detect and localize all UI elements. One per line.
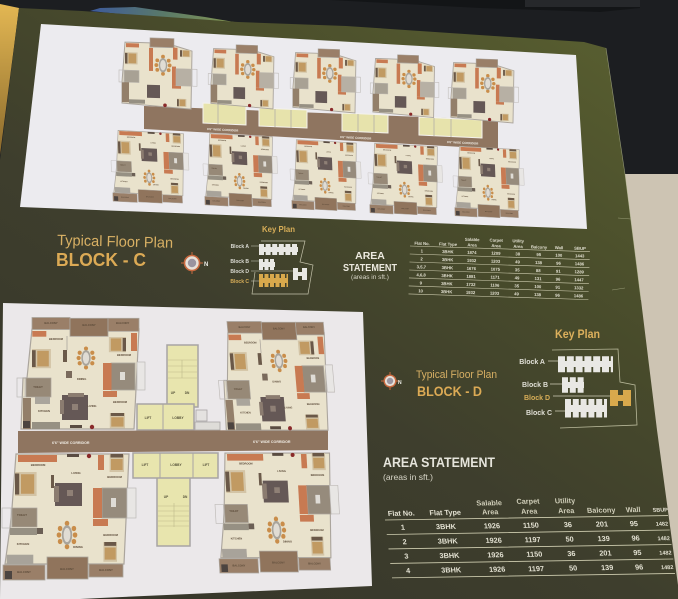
upper stair core <box>137 345 220 430</box>
table: Block D area statement: 201 <box>599 548 612 558</box>
key plan: Block C <box>230 224 313 294</box>
lower stair core: LIFT <box>203 463 209 467</box>
table: Block C area statement: Wall <box>555 245 563 250</box>
table: Block C area statement: 1676 <box>467 266 477 271</box>
table: Block D area statement: 1926 <box>488 565 506 574</box>
table: Block D area statement: Salable <box>476 498 502 508</box>
lower stair core: DN <box>183 495 188 499</box>
flat: top left <box>17 318 145 429</box>
table: Block C area statement <box>408 235 590 300</box>
table: Block D area statement: 1482 <box>661 565 674 571</box>
key plan: Block C: Block B <box>230 259 249 265</box>
key plan: Block C: Block C <box>230 279 249 285</box>
icon: north compass C: N <box>204 262 208 268</box>
upper stair core: LIFT <box>145 416 151 420</box>
table: Block C area statement: 100 <box>534 284 542 289</box>
key plan: Block D: Block A <box>519 359 545 366</box>
table: Block C area statement: 10 <box>418 288 424 293</box>
table: Block D area statement: 201 <box>595 520 609 529</box>
table: Block D area statement: 1482 <box>659 551 672 557</box>
corridor: Block D: 6'6" WIDE CORRIDOR <box>253 440 291 444</box>
table: Block D area statement <box>382 495 676 578</box>
lower stair core: UP <box>164 495 169 499</box>
table: Block C area statement: 138 <box>535 260 543 265</box>
table: Block C area statement: 49 <box>515 275 520 280</box>
corridor: Block D: 6'6" WIDE CORRIDOR <box>52 441 90 445</box>
table: Block D area statement: 96 <box>631 534 640 543</box>
table: Block C area statement: Flat Type <box>439 241 458 247</box>
heading: Block D: Typical Floor Plan <box>416 369 497 381</box>
table: Block C area statement: 49 <box>514 291 520 296</box>
table: Block C area statement: Carpet <box>490 237 504 243</box>
top row flats <box>119 37 518 123</box>
table: Block C area statement: 100 <box>555 253 563 258</box>
table: Block D area statement: 1 <box>400 523 405 532</box>
background: beige fabric surface <box>625 174 678 599</box>
core: stair and lift lobbies <box>203 103 482 138</box>
key plan: Block D: Block D <box>524 395 550 402</box>
table: Block D area statement: 3 <box>404 552 409 561</box>
table: Block D area statement: 96 <box>635 562 644 572</box>
table: Block C area statement: 38 <box>515 251 521 256</box>
flat: bottom left <box>2 454 136 580</box>
area statement heading: Block D: (areas in sft.) <box>383 472 433 482</box>
icon: north compass D <box>381 372 402 390</box>
table: Block C area statement: 1486 <box>574 293 584 298</box>
table: Block C area statement: 1203 <box>490 291 500 296</box>
table: Block D area statement: 3BHK <box>441 565 462 575</box>
table: Block D area statement: Flat Type <box>429 508 461 517</box>
bottom row flats <box>110 130 525 220</box>
table: Block C area statement: Area <box>467 242 477 248</box>
table: Block C area statement: 1289 <box>575 269 585 274</box>
heading: Block D: BLOCK - D <box>417 383 482 399</box>
upper stair core: LOBBY <box>172 416 184 420</box>
area statement heading: Block D <box>383 454 495 482</box>
table: Block C area statement: Utility <box>512 238 525 244</box>
area statement heading: Block C: AREA <box>355 250 385 262</box>
table: Block C area statement: 1203 <box>491 259 501 264</box>
table: Block C area statement: Area <box>491 243 501 248</box>
table: Block C area statement: 1932 <box>466 290 476 295</box>
heading: Block C: BLOCK - C <box>56 250 146 270</box>
table: Block C area statement: 3BHK <box>442 265 453 270</box>
table: Block C area statement: 3BHK <box>441 273 453 278</box>
table: Block C area statement: 1932 <box>467 258 477 263</box>
table: Block D area statement: 95 <box>633 548 642 557</box>
table: Block C area statement: 1332 <box>574 285 584 290</box>
table: Block C area statement: 3BHK <box>442 249 454 254</box>
table: Block C area statement: Flat No. <box>414 241 430 246</box>
table: Block C area statement: Salable <box>465 237 480 242</box>
table: Block C area statement: 4,6,8 <box>416 272 426 278</box>
table: Block D area statement: 36 <box>563 520 572 529</box>
table: Block D area statement: 1926 <box>483 521 501 530</box>
table: Block D area statement: Flat No. <box>387 509 415 518</box>
corridor: Block C <box>144 106 498 149</box>
table: Block D area statement: 3BHK <box>435 522 457 531</box>
table: Block D area statement: Balcony <box>586 505 617 515</box>
table: Block C area statement: 1874 <box>467 250 477 255</box>
table: Block D area statement: SBUP <box>652 508 669 514</box>
table: Block C area statement: 95 <box>536 252 542 257</box>
table: Block D area statement: 3BHK <box>439 551 461 560</box>
table: Block C area statement: 96 <box>556 261 562 266</box>
table: Block D area statement: 95 <box>629 519 638 528</box>
key plan: Block D: Block C <box>526 410 552 417</box>
table: Block D area statement: 4 <box>406 566 412 575</box>
table: Block C area statement: 1209 <box>491 251 501 256</box>
table: Block D area statement: 1197 <box>528 564 545 573</box>
key plan: Block C: Block A <box>231 244 249 250</box>
key plan: Block C: Block D <box>230 269 249 275</box>
table: Block C area statement: SBUP <box>574 246 586 251</box>
table: Block D area statement: Carpet <box>516 497 541 506</box>
area statement heading: Block C <box>343 250 398 281</box>
table: Block C area statement: 96 <box>556 277 561 282</box>
table: Block C area statement: 3,5,7 <box>417 264 427 270</box>
table: Block D area statement: Utility <box>554 496 577 505</box>
table: Block D area statement: Wall <box>625 505 641 514</box>
corridor: Block D <box>18 430 328 453</box>
table: Block C area statement: 1171 <box>490 275 500 280</box>
table: Block D area statement: 1197 <box>524 535 541 544</box>
table: Block D area statement: 1926 <box>485 536 502 545</box>
table: Block C area statement: 49 <box>515 259 521 264</box>
area statement heading: Block D: AREA STATEMENT <box>383 454 495 470</box>
table: Block C area statement: 1881 <box>466 274 476 279</box>
table: Block D area statement: 1150 <box>526 550 543 559</box>
table: Block D area statement: 1926 <box>487 550 504 559</box>
table: Block C area statement: 1732 <box>466 282 476 287</box>
key plan: Block C: Key Plan <box>262 224 295 234</box>
icon: north compass C <box>181 252 208 274</box>
table: Block D area statement: 139 <box>601 563 614 572</box>
area statement heading: Block C: STATEMENT <box>343 262 398 274</box>
table: Block C area statement: 138 <box>534 292 542 297</box>
table: Block D area statement: Area <box>521 507 539 516</box>
area statement heading: Block C: (areas in sft.) <box>351 274 389 281</box>
table: Block C area statement: 1447 <box>574 277 584 282</box>
panel: Block C floor plan <box>20 24 587 229</box>
table: Block D area statement: 1482 <box>656 522 669 528</box>
table: Block C area statement: 9 <box>420 280 423 285</box>
background: printed artwork peeking out <box>90 7 240 23</box>
upper stair core: UP <box>171 391 176 395</box>
heading: Block C <box>56 232 173 270</box>
table: Block C area statement: 2 <box>420 256 424 261</box>
table: Block D area statement: 36 <box>567 549 576 558</box>
table: Block D area statement: Area <box>482 507 500 516</box>
lower stair core <box>133 453 218 546</box>
table: Block D area statement: 1482 <box>657 536 670 542</box>
panel: Block D floor plan <box>0 303 372 599</box>
key plan: Block D: Key Plan <box>555 329 600 341</box>
table: Block C area statement: 88 <box>536 268 541 273</box>
corridor: Block C: 6'6" WIDE CORRIDOR <box>447 140 479 146</box>
table: Block C area statement: 3BHK <box>441 281 453 286</box>
table: Block C area statement: 3BHK <box>442 257 453 262</box>
corridor: Block C: 6'6" WIDE CORRIDOR <box>340 135 372 141</box>
table: Block C area statement: 3BHK <box>441 289 452 294</box>
table: Block C area statement: 1 <box>421 248 424 253</box>
table: Block D area statement: 2 <box>402 537 407 546</box>
table: Block C area statement: Area <box>513 244 523 249</box>
lower stair core: LIFT <box>142 463 148 467</box>
table: Block C area statement: 91 <box>555 285 561 290</box>
heading: Block D <box>416 369 497 399</box>
table: Block D area statement: 3BHK <box>437 536 459 546</box>
flat: bottom right <box>212 453 343 573</box>
table: Block C area statement: 91 <box>556 269 561 274</box>
flat: top right <box>213 321 338 430</box>
table: Block C area statement: 1486 <box>575 261 585 266</box>
table: Block C area statement: 131 <box>534 276 542 281</box>
table: Block D area statement: 1150 <box>522 521 539 530</box>
table: Block C area statement: 35 <box>514 283 520 288</box>
background: yellow folder corner <box>0 4 19 155</box>
lower stair core: LOBBY <box>170 463 182 467</box>
table: Block C area statement: 1075 <box>491 267 501 272</box>
key plan: Block D <box>519 329 637 428</box>
key plan: Block D: Block B <box>522 382 548 389</box>
heading: Block C: Typical Floor Plan <box>57 232 173 252</box>
table: Block D area statement: 139 <box>597 534 610 543</box>
corridor: Block C: 6'6" WIDE CORRIDOR <box>207 127 239 133</box>
table: Block C area statement: 1106 <box>490 283 500 288</box>
table: Block D area statement: Area <box>558 506 576 515</box>
upper stair core: DN <box>185 391 190 395</box>
table: Block D area statement: 50 <box>569 564 578 573</box>
table: Block C area statement: Balcony <box>531 244 548 250</box>
table: Block C area statement: 1443 <box>575 253 585 259</box>
table: Block C area statement: 35 <box>515 267 520 272</box>
icon: north compass D: N <box>398 380 402 386</box>
table: Block C area statement: 96 <box>555 293 561 298</box>
table: Block D area statement: 50 <box>565 535 574 544</box>
